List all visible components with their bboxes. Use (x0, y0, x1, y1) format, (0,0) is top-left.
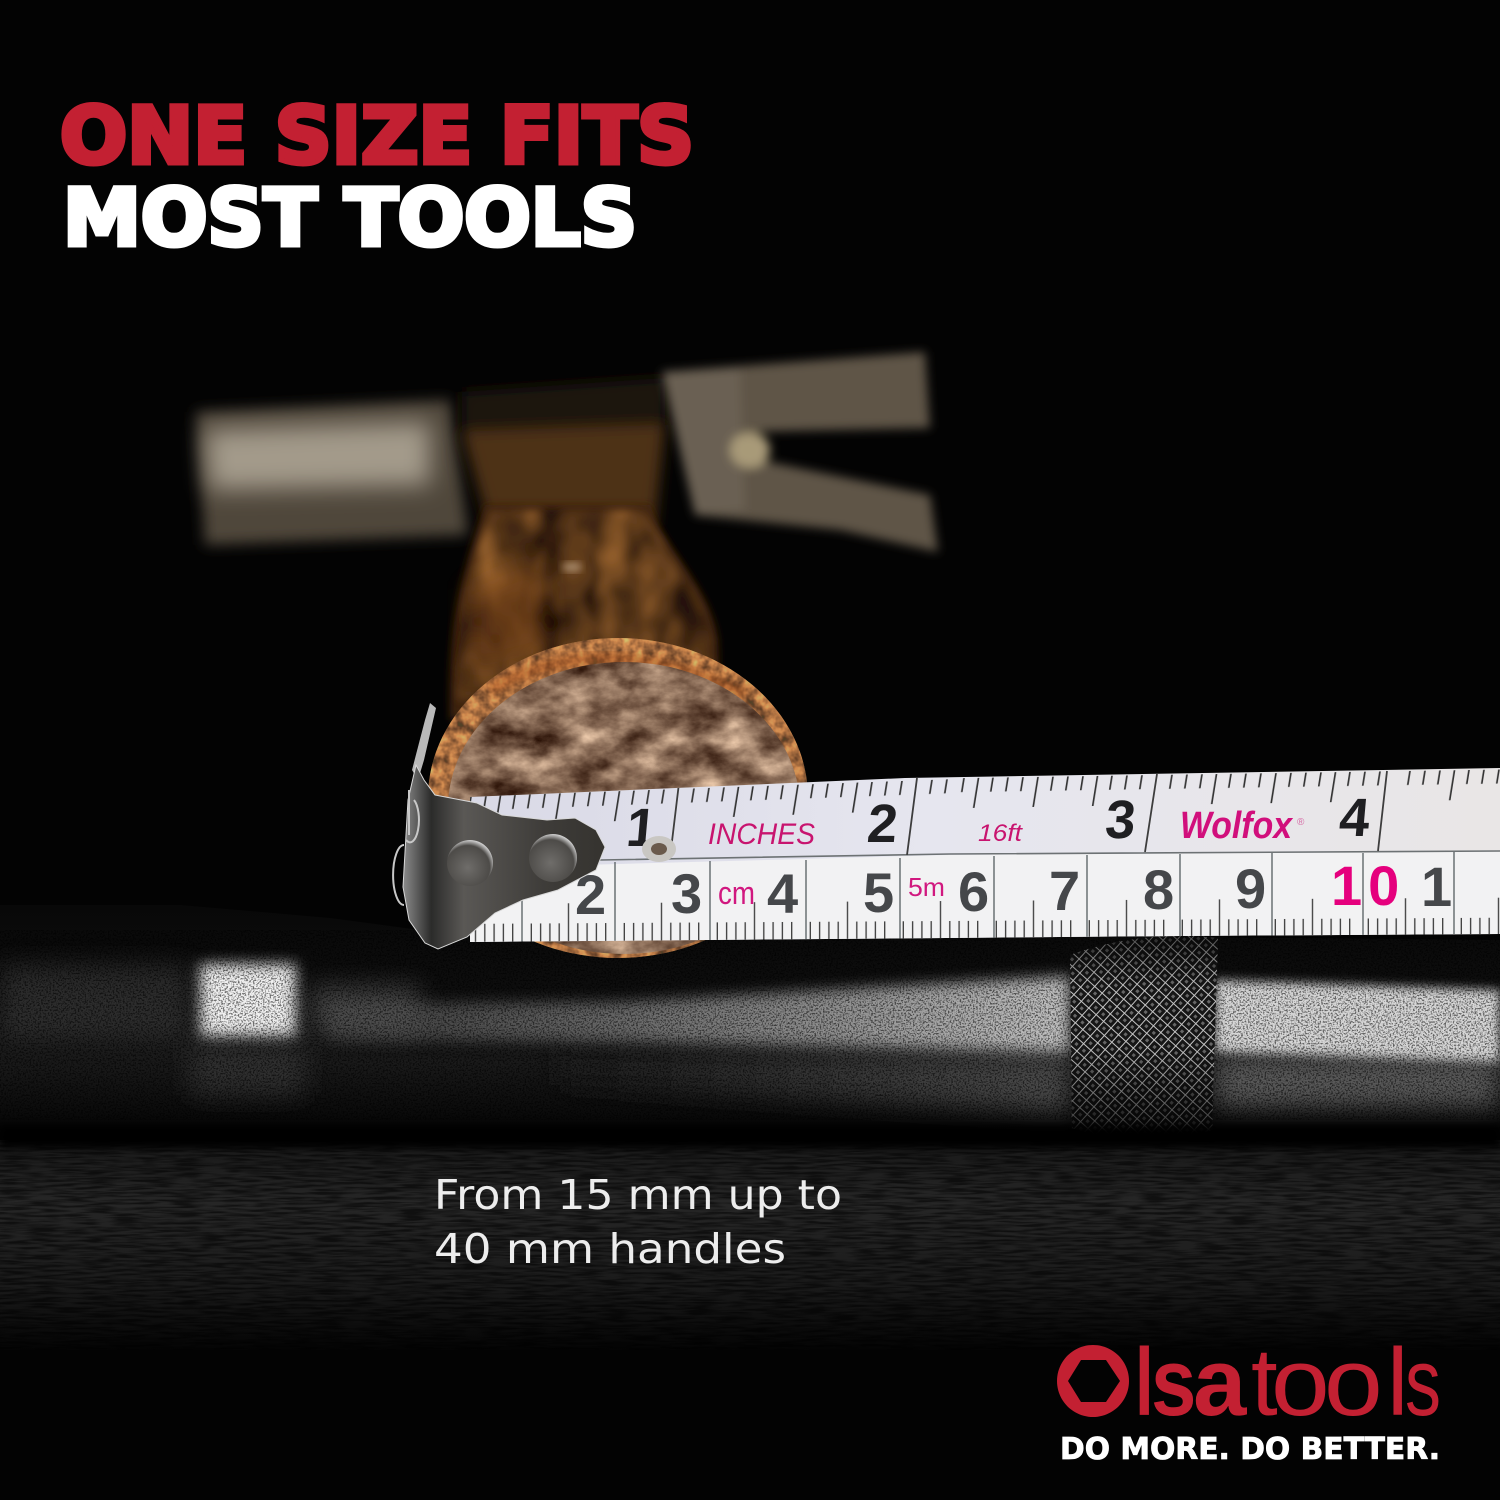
inch numerals: 4 (1337, 788, 1372, 848)
bar speckle (0, 930, 1500, 1120)
hammer head, out of focus (196, 352, 938, 552)
logo bold wordmark: a (1193, 1329, 1247, 1436)
logo bold wordmark: s (1151, 1328, 1196, 1435)
black steel bar (0, 905, 1500, 1130)
hammer handle (450, 505, 720, 720)
caption: 40 mm handles (434, 1225, 786, 1273)
title line: one size fits: ONE SIZE FITS (60, 92, 694, 182)
centimetre numerals: 3 (671, 862, 702, 925)
logo light wordmark: t (1251, 1329, 1278, 1436)
knurled grip band (1070, 936, 1218, 1140)
hammer neck (462, 378, 665, 530)
inch numerals: 3 (1103, 790, 1138, 850)
centimetre numerals (575, 855, 1452, 926)
hammer claw (662, 352, 938, 552)
logo light wordmark (1251, 1328, 1441, 1436)
centimetre numerals: 4 (767, 862, 798, 925)
tagline: DO MORE. DO BETTER. (1060, 1432, 1440, 1467)
dark cloth under bar (0, 1126, 1500, 1350)
rivet (447, 840, 493, 886)
bar hot spot (200, 964, 296, 1036)
tape body (470, 768, 1500, 942)
logo light wordmark: o (1271, 1329, 1330, 1436)
16ft label: 16ft (978, 820, 1023, 847)
eyelet (642, 836, 676, 862)
brand on tape: ® (1297, 817, 1305, 828)
hammer poll (196, 400, 468, 545)
cm label: cm (718, 875, 755, 911)
centimetre numerals: 2 (575, 863, 606, 926)
tape end hook (393, 703, 605, 949)
inch numerals: 2 (865, 794, 900, 854)
title line: most tools: MOST TOOLS (63, 174, 637, 264)
5m label: 5m (908, 872, 945, 902)
centimetre numerals: 1 (1421, 855, 1452, 918)
logo bold wordmark: l (1135, 1328, 1154, 1436)
bar highlight band (0, 964, 1500, 1062)
centimetre numerals: 8 (1143, 858, 1174, 921)
logo icon: hexagon O (1057, 1345, 1129, 1417)
inch numerals: 1 (624, 798, 659, 858)
logo light wordmark: s (1405, 1328, 1441, 1435)
caption (434, 1171, 842, 1273)
rivet (529, 834, 577, 882)
measuring tape (470, 765, 1500, 945)
title (60, 92, 694, 264)
caption: From 15 mm up to (434, 1171, 842, 1219)
inch numerals (624, 788, 1372, 858)
bar lower sheen (190, 1040, 1500, 1112)
centimetre tick marks (470, 852, 1500, 945)
logo (1057, 1328, 1441, 1467)
brand on tape: Wolfox (1180, 805, 1294, 847)
centimetre numerals: 7 (1049, 859, 1080, 922)
logo light wordmark: o (1324, 1329, 1383, 1436)
inches label: INCHES (708, 818, 815, 851)
inch tick marks (470, 765, 1500, 858)
handle end grain (428, 638, 808, 958)
centimetre numerals: 5 (863, 861, 894, 924)
centimetre numerals: 9 (1235, 857, 1266, 920)
magenta ten: 10 (1331, 854, 1405, 917)
logo bold wordmark (1135, 1328, 1247, 1436)
centimetre numerals: 6 (958, 860, 989, 923)
logo light wordmark: l (1387, 1329, 1408, 1436)
